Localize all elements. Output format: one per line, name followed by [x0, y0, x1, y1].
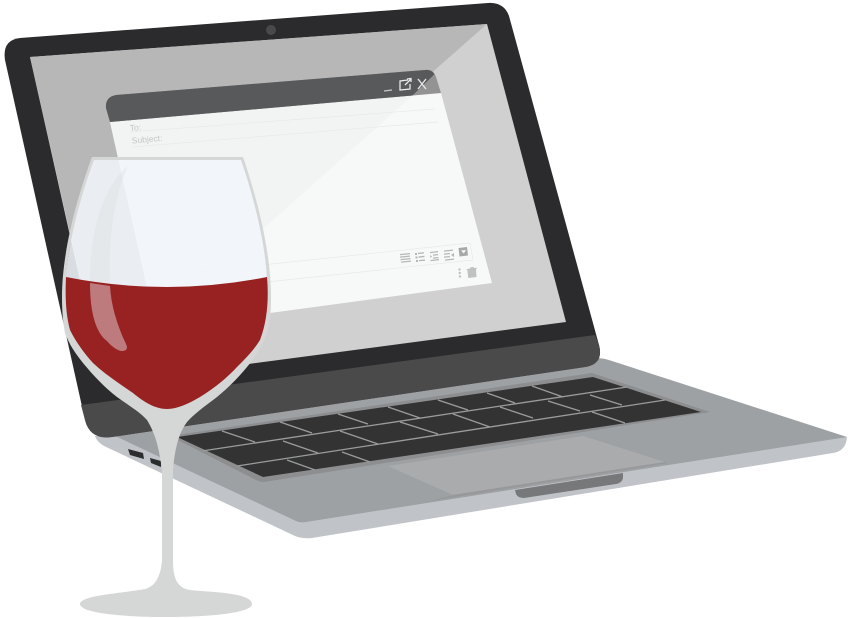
minimise icon: [384, 90, 392, 91]
dropdown box: [458, 247, 468, 256]
keyboard well: [170, 373, 710, 482]
screen glare: [30, 24, 487, 365]
outdent icon: [430, 251, 439, 261]
glass outline, stem and foot: [62, 157, 271, 617]
wine glass: [62, 157, 271, 617]
screen: [30, 24, 566, 382]
laptop lid: [5, 3, 600, 437]
glass interior: [65, 159, 268, 297]
more dots: [458, 268, 461, 278]
title bar: [106, 70, 441, 122]
base deck: [113, 358, 847, 522]
indent icon: [444, 250, 454, 261]
base front edge: [95, 436, 847, 538]
title bar dark part: [106, 70, 434, 122]
close icon: [418, 79, 426, 89]
pop-out icon: [400, 78, 411, 90]
webcam: [266, 25, 276, 35]
subject label: Subject:: [131, 133, 163, 145]
lid bezel: [5, 3, 600, 437]
toolbar icons: [400, 250, 454, 263]
wine highlight: [90, 283, 127, 351]
email window: [106, 70, 492, 313]
glass highlight upper: [90, 166, 128, 283]
key field: [177, 377, 701, 477]
port 1: [128, 449, 144, 459]
window glare: [110, 125, 118, 157]
trackpad: [388, 436, 665, 495]
to label: To:: [129, 122, 141, 133]
window body: [110, 93, 492, 328]
align icon: [400, 253, 411, 263]
list icon: [415, 252, 425, 262]
port 2: [150, 458, 161, 467]
keyboard keys: [177, 377, 701, 477]
laptop base: [95, 358, 847, 538]
key separators: [202, 386, 665, 470]
thumb notch: [515, 473, 623, 498]
dropdown icon: [458, 247, 468, 256]
wine: [66, 277, 268, 409]
front lip shade: [430, 462, 668, 501]
form lines: [130, 109, 473, 285]
lid chin band: [81, 335, 600, 437]
dropdown arrow: [461, 250, 466, 254]
trash icon: [466, 267, 477, 278]
